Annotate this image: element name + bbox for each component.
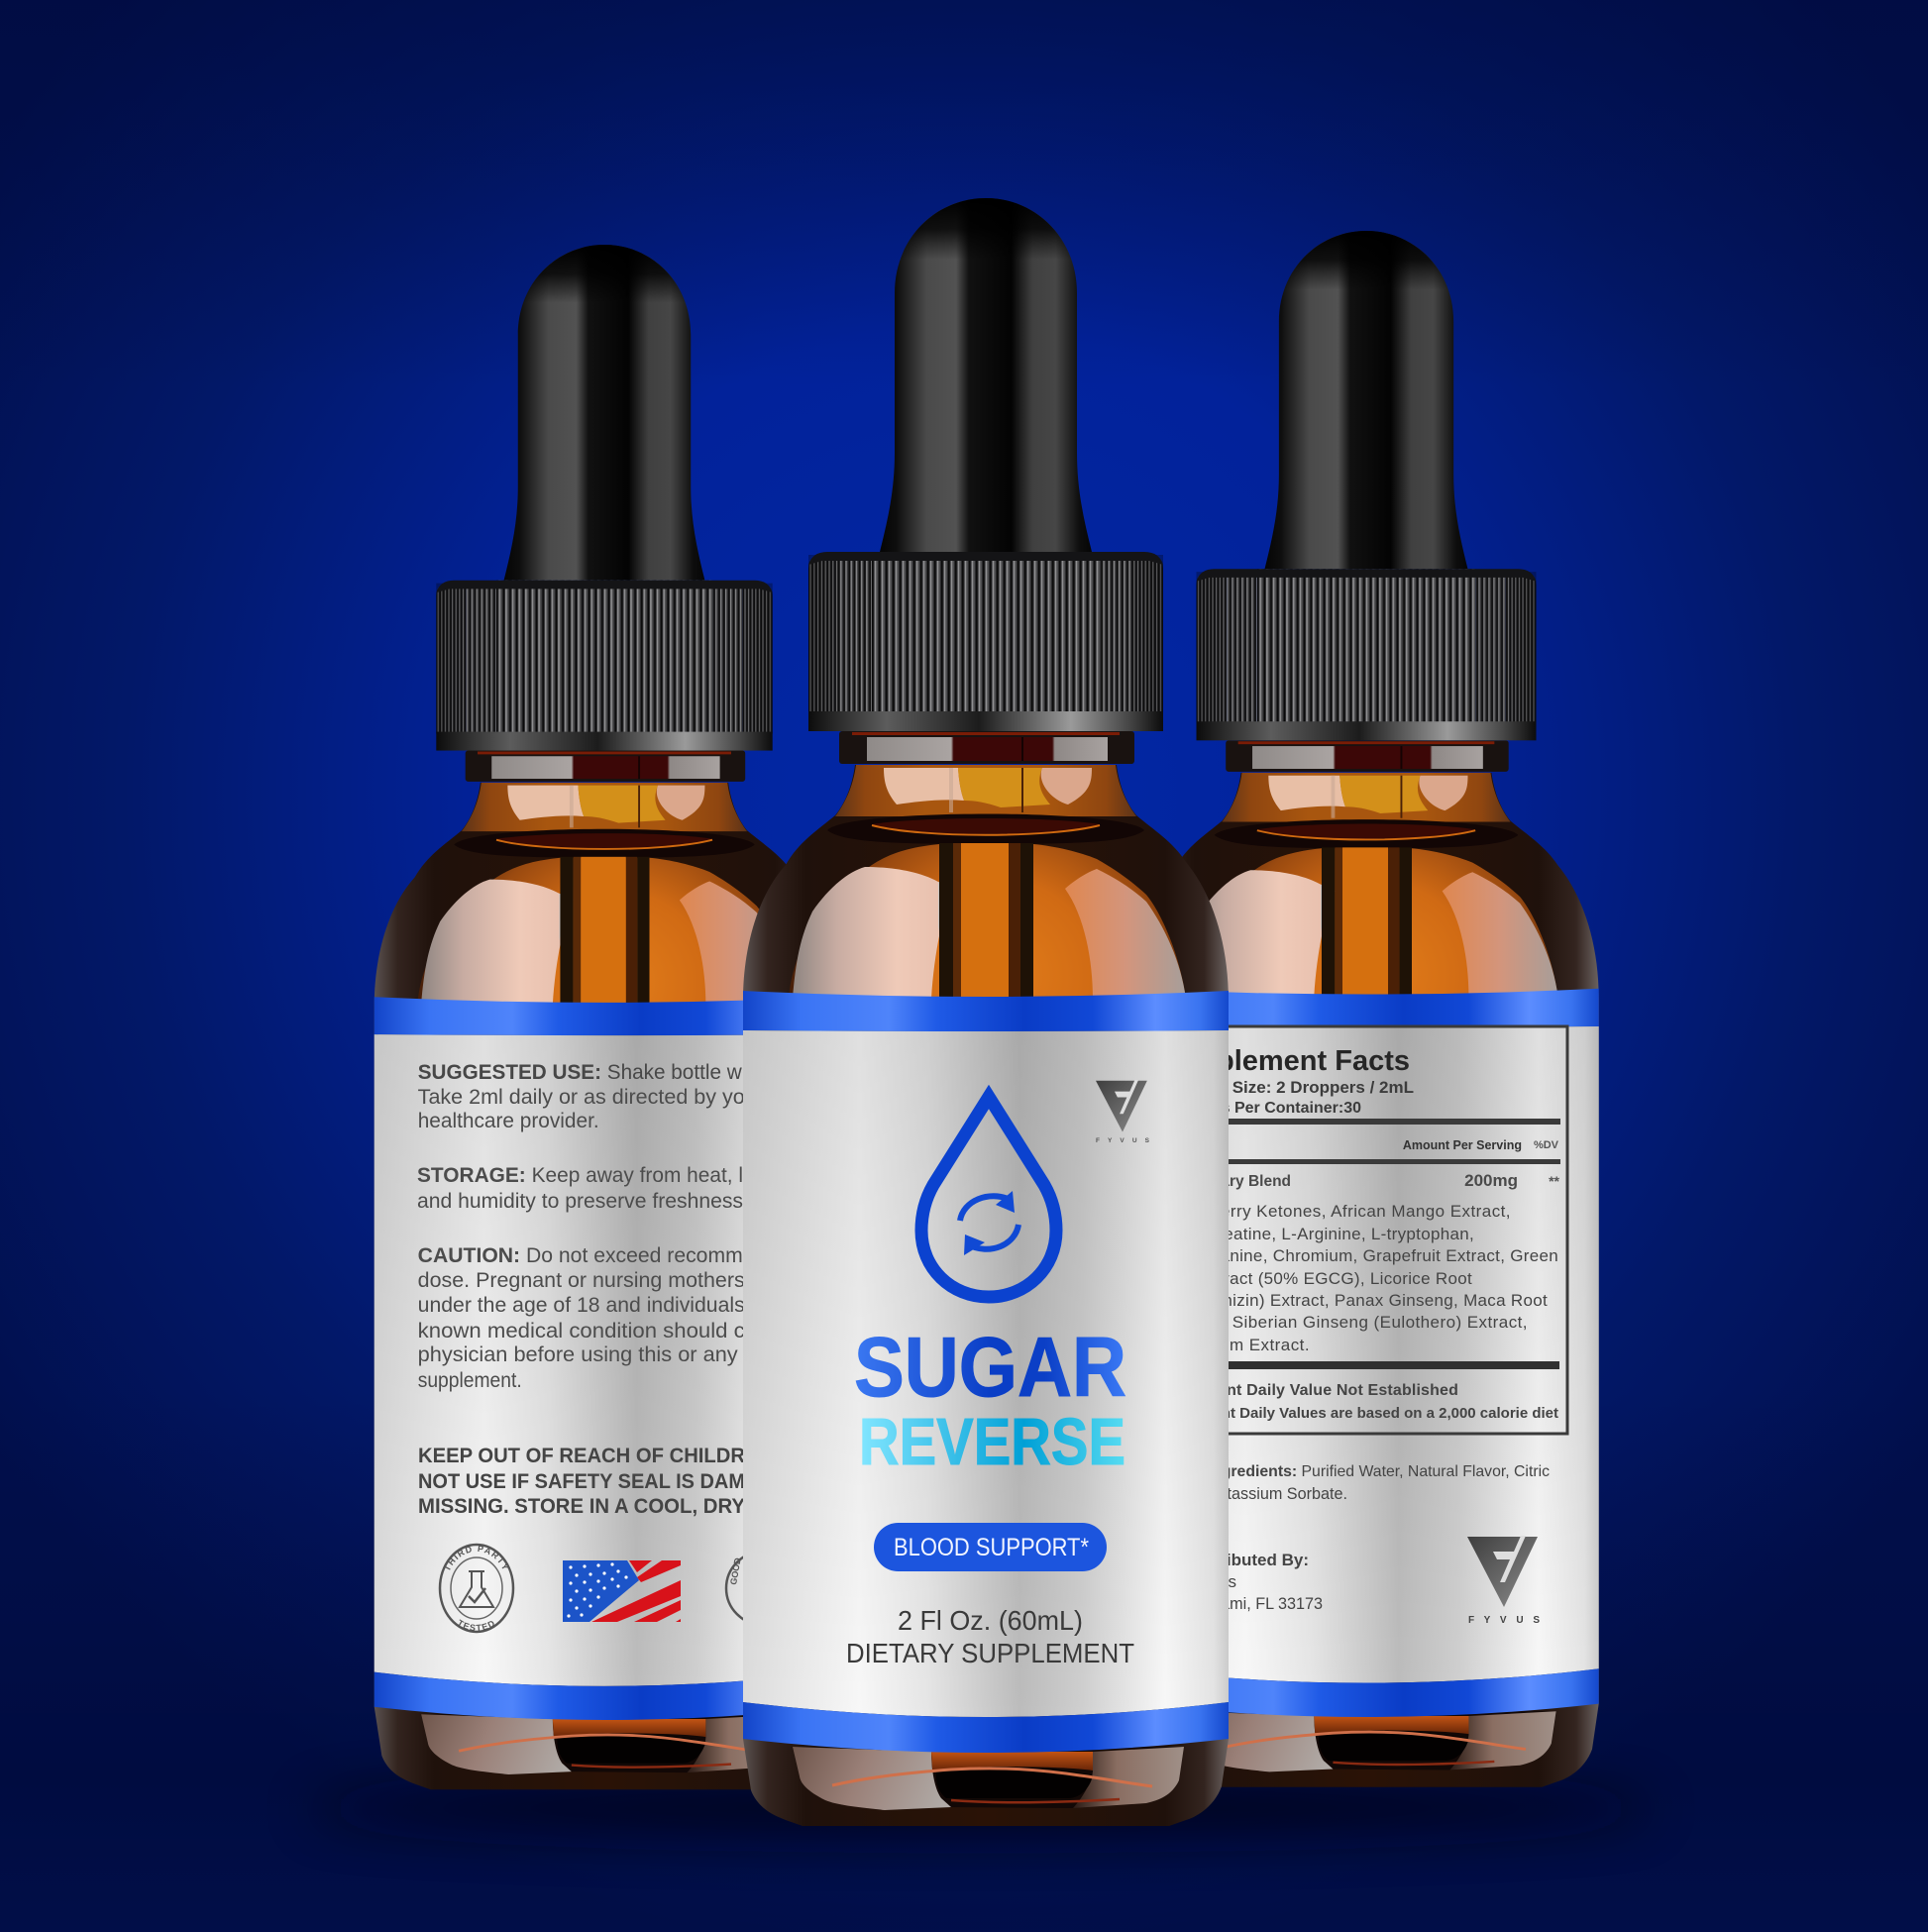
serving size: Serving Size: 2 Droppers / 2mL <box>1166 1078 1414 1097</box>
pill badge <box>874 1523 1107 1571</box>
blend footnote mark: ** <box>1549 1173 1560 1189</box>
ingredient line 2: Creatine, L-Arginine, L-tryptophan, <box>1206 1225 1474 1243</box>
icon: refresh arrows <box>960 1191 1018 1255</box>
caution line 4: known medical condition should c <box>418 1320 745 1342</box>
ingredient line 4: Tea Extract (50% EGCG), Licorice Root <box>1165 1269 1472 1288</box>
small logo wordmark: F Y V U S <box>1096 1137 1150 1144</box>
badge: good manufacturing: GOOD <box>728 1556 743 1585</box>
storage line 2: and humidity to preserve freshness <box>417 1190 743 1213</box>
brand name: SUGAR: SUGAR <box>854 1321 1126 1415</box>
rule <box>1154 1119 1560 1125</box>
badge: third party tested: THIRD PARTY <box>445 1546 507 1570</box>
storage text: STORAGE: Keep away from heat, l <box>417 1164 743 1187</box>
rule <box>1154 1159 1560 1164</box>
suggested use text: SUGGESTED USE: Shake bottle w <box>418 1061 743 1084</box>
other ingredients line 2: Acid, Potassium Sorbate. <box>1167 1485 1347 1503</box>
company: Fyvus <box>1192 1572 1236 1591</box>
caution line 6: supplement. <box>418 1369 522 1392</box>
warning line 1: KEEP OUT OF REACH OF CHILDR <box>418 1445 745 1467</box>
ingredient line 6: Extract, Siberian Ginseng (Eulothero) Extract, <box>1166 1313 1528 1332</box>
proprietary blend: Proprietary Blend <box>1162 1173 1291 1190</box>
center bottle: front label <box>743 198 1229 1826</box>
warning line 2: NOT USE IF SAFETY SEAL IS DAM <box>418 1470 745 1493</box>
city: Miami, FL 33173 <box>1204 1595 1323 1613</box>
distributed by: Distributed By: <box>1188 1551 1309 1569</box>
calorie note: Percent Daily Values are based on a 2,000 calorie diet <box>1181 1405 1558 1422</box>
brand name: REVERSE: REVERSE <box>859 1405 1125 1479</box>
suggested use line 2: Take 2ml daily or as directed by yo <box>418 1086 745 1109</box>
daily value note: Percent Daily Value Not Established <box>1183 1382 1458 1399</box>
warning line 3: MISSING. STORE IN A COOL, DRY <box>418 1495 745 1518</box>
supplement facts box <box>1154 1026 1567 1434</box>
percent daily value: %DV <box>1534 1139 1559 1151</box>
ingredient line 3: L-Theanine, Chromium, Grapefruit Extract, Green <box>1175 1246 1558 1265</box>
blend amount: 200mg <box>1464 1171 1518 1190</box>
pill badge: BLOOD SUPPORT* <box>894 1534 1089 1561</box>
logo wordmark: F Y V U S <box>1468 1615 1540 1626</box>
floor shadow <box>307 1780 1655 1836</box>
suggested use line 3: healthcare provider. <box>418 1110 599 1132</box>
right bottle: supplement facts label <box>1133 231 1599 1787</box>
caution line 2: dose. Pregnant or nursing mothers <box>418 1269 745 1292</box>
right bottle body <box>1133 231 1599 1787</box>
caution line 5: physician before using this or any <box>418 1343 738 1366</box>
left bottle body <box>375 245 834 1789</box>
icon: USA flag <box>563 1560 681 1622</box>
servings per container: Servings Per Container:30 <box>1163 1100 1361 1117</box>
badge: third party tested: TESTED <box>459 1619 494 1631</box>
amount per serving: Amount Per Serving <box>1403 1138 1522 1152</box>
supplement facts heading: Supplement Facts <box>1162 1045 1410 1077</box>
badge: third party tested <box>438 1544 515 1633</box>
icon: FYVUS logo large <box>1467 1536 1538 1607</box>
caution text: CAUTION: Do not exceed recomm <box>418 1244 743 1267</box>
volume text: 2 Fl Oz. (60mL) <box>898 1605 1083 1636</box>
ingredient line 1: Raspberry Ketones, African Mango Extract, <box>1170 1202 1511 1221</box>
caution line 3: under the age of 18 and individuals <box>418 1294 745 1317</box>
other ingredients: Other Ingredients: Purified Water, Natural Flavor, Citric <box>1161 1463 1550 1480</box>
icon: FYVUS logo small <box>1096 1080 1147 1132</box>
ingredient line 7: Chromium Extract. <box>1163 1336 1310 1354</box>
left bottle: directions label <box>375 245 787 1789</box>
dietary supplement text: DIETARY SUPPLEMENT <box>846 1638 1134 1668</box>
badge: good manufacturing <box>726 1552 800 1625</box>
thick rule <box>1154 1361 1559 1369</box>
ingredient line 5: (Glycyrrhizin) Extract, Panax Ginseng, Maca Root <box>1162 1291 1548 1310</box>
center bottle body <box>743 198 1229 1826</box>
icon: water drop <box>921 1097 1056 1297</box>
